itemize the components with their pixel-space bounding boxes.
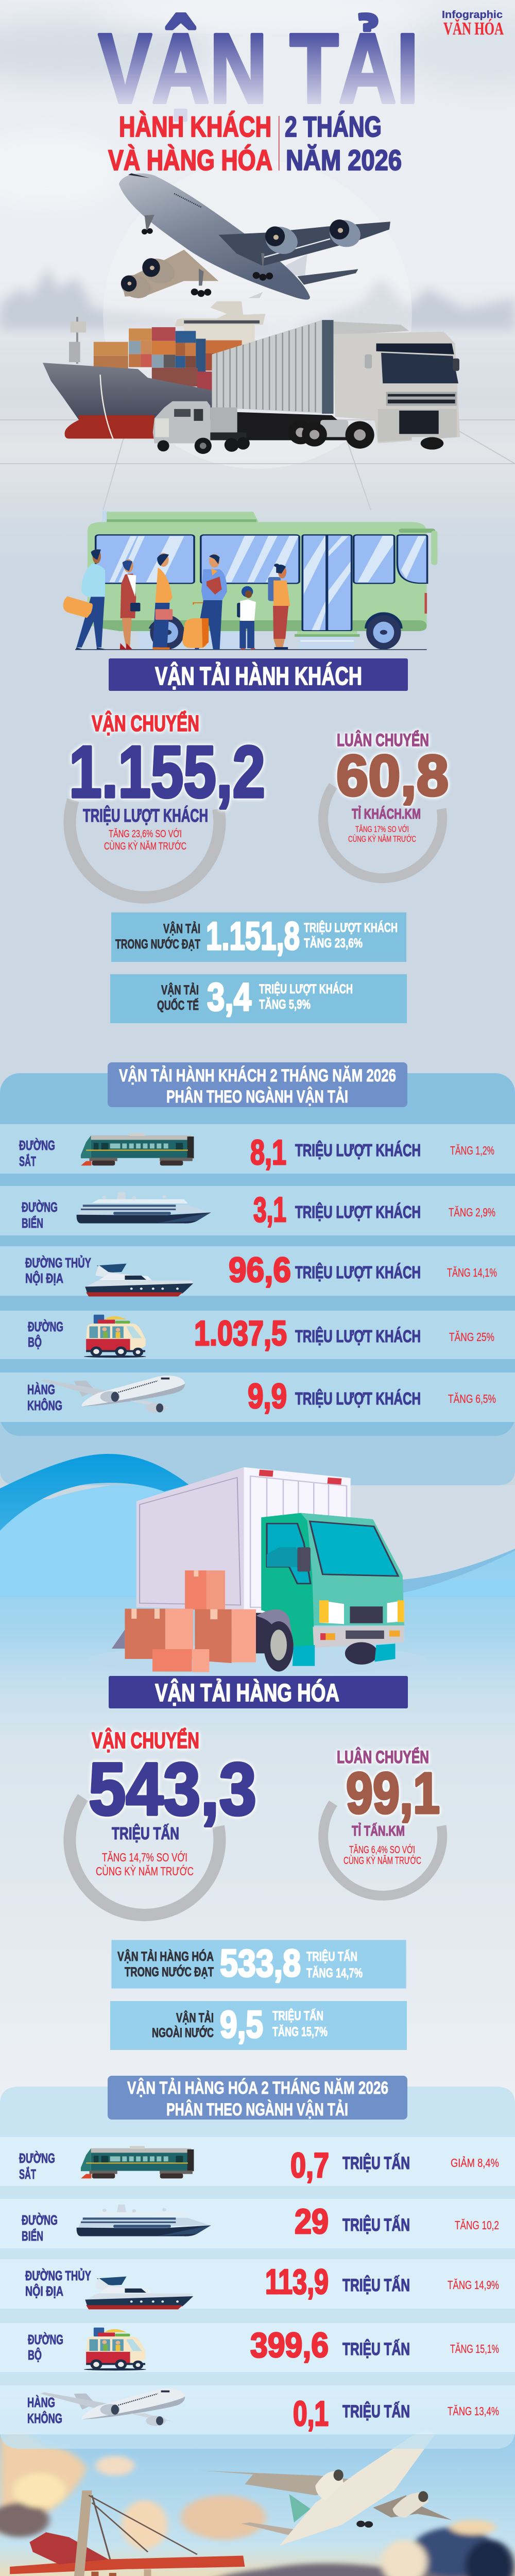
box: domestic passenger transport: VẬN TẢI: [163, 921, 200, 936]
row: air: TĂNG 6,5%: [448, 1392, 496, 1405]
row: rail: ĐƯỜNG: [19, 1138, 55, 1153]
photo: aircraft over port: [204, 2431, 452, 2546]
stat: freight carriage: TĂNG 14,7% SO VỚI: [102, 1851, 187, 1864]
stat: freight rotation: [323, 1748, 442, 1895]
row: sea: 29: [295, 2202, 329, 2241]
stat: passenger carriage: 1.155,2: [69, 731, 265, 813]
box: international passenger transport: QUỐC TẾ: [157, 997, 199, 1013]
box: domestic passenger transport: [111, 912, 406, 962]
box: domestic passenger transport: TRONG NƯỚC ĐẠT: [115, 936, 200, 952]
row: air: HÀNG: [27, 2395, 55, 2410]
subtitle: passenger and freight, 2 months 2026: [108, 110, 402, 176]
row: road: [0, 2323, 515, 2372]
logo: Infographic Văn Hóa: Infographic: [442, 9, 503, 21]
row: sea: [0, 1186, 515, 1235]
row: rail: [0, 1124, 515, 1174]
subtitle: passenger and freight, 2 months 2026: VÀ HÀNG HÓA: [108, 144, 272, 176]
section banner: freight transport: [109, 1676, 408, 1708]
hero photo background: [0, 0, 515, 567]
box: domestic freight: TĂNG 14,7%: [306, 1965, 363, 1980]
row: sea: 3,1: [253, 1190, 286, 1229]
row: sea: TĂNG 10,2: [455, 2218, 499, 2232]
row: rail: TRIỆU LƯỢT KHÁCH: [295, 1141, 421, 1160]
row: air: TRIỆU TẤN: [342, 2402, 410, 2421]
row: inland waterway: 113,9: [265, 2262, 329, 2301]
logo: Infographic Văn Hóa: [442, 9, 504, 39]
stat: freight carriage: CÙNG KỲ NĂM TRƯỚC: [96, 1865, 194, 1878]
row: sea: TĂNG 2,9%: [449, 1206, 495, 1219]
stat: passenger rotation: TỈ KHÁCH.KM: [352, 805, 421, 822]
stat: freight rotation: 99,1: [346, 1761, 440, 1825]
row: inland waterway: TRIỆU TẤN: [342, 2276, 410, 2295]
heading: passenger by mode: VẬN TẢI HÀNH KHÁCH 2 THÁNG NĂM 2026: [119, 1066, 396, 1086]
row: inland waterway: NỘI ĐỊA: [25, 2283, 63, 2299]
stat: passenger carriage: CÙNG KỲ NĂM TRƯỚC: [104, 840, 186, 852]
title: VẬN TẢI: VẬN TẢI: [98, 13, 419, 124]
row: rail: [0, 2137, 515, 2186]
box: international passenger transport: TRIỆU LƯỢT KHÁCH: [259, 981, 353, 996]
box: international freight: [110, 2001, 407, 2050]
row: road: 399,6: [250, 2326, 329, 2365]
stat: passenger rotation: 60,8: [336, 743, 449, 808]
heading: freight by mode: PHÂN THEO NGÀNH VẬN TẢI: [166, 2100, 348, 2120]
row: air: 9,9: [248, 1377, 287, 1416]
row: rail: TĂNG 1,2%: [450, 1144, 494, 1157]
row: road: ĐƯỜNG: [28, 1319, 63, 1334]
stat: passenger carriage: [69, 710, 265, 897]
box: international freight: TRIỆU TẤN: [272, 2008, 323, 2023]
stat: passenger carriage: TRIỆU LƯỢT KHÁCH: [83, 805, 208, 826]
stat: freight rotation: TĂNG 6,4% SO VỚI: [349, 1844, 415, 1856]
row: air: [0, 2385, 515, 2434]
box: international freight: 9,5: [220, 2003, 263, 2046]
row: road: ĐƯỜNG: [28, 2332, 63, 2347]
stat: freight rotation: LUÂN CHUYỂN: [337, 1748, 429, 1767]
row: air: KHÔNG: [27, 2411, 62, 2426]
box: domestic passenger transport: TĂNG 23,6%: [304, 936, 363, 951]
hero illustration: airplane: [118, 173, 390, 302]
row: sea: TRIỆU TẤN: [342, 2215, 410, 2235]
hero illustration: large container truck: [212, 320, 460, 450]
freight background: [0, 1391, 515, 2112]
box: international passenger transport: TĂNG 5,9%: [259, 997, 311, 1012]
row: rail: ĐƯỜNG: [19, 2150, 55, 2166]
row: inland waterway: NỘI ĐỊA: [25, 1270, 63, 1286]
box: international freight: TĂNG 15,7%: [272, 2024, 328, 2039]
box: domestic passenger transport: TRIỆU LƯỢT KHÁCH: [304, 920, 398, 935]
heading: passenger by mode: PHÂN THEO NGÀNH VẬN TẢI: [166, 1087, 348, 1107]
row: air: KHÔNG: [27, 1398, 62, 1413]
row: rail: SẮT: [19, 2166, 36, 2182]
stat: passenger rotation: [323, 731, 449, 878]
row: rail: 0,7: [290, 2146, 329, 2185]
row: sea: [0, 2199, 515, 2248]
row: air: [0, 1372, 515, 1422]
box: domestic freight: TRONG NƯỚC ĐẠT: [125, 1964, 214, 1979]
box: international freight: NGOÀI NƯỚC: [152, 2025, 214, 2040]
row: road: BỘ: [28, 1334, 42, 1350]
box: international freight: VẬN TẢI: [176, 2010, 214, 2025]
panel: freight transport by mode: [0, 2076, 515, 2449]
row: road: [0, 1311, 515, 1359]
row: road: 1.037,5: [194, 1314, 287, 1353]
row: road: TRIỆU TẤN: [342, 2340, 410, 2359]
stat: freight rotation: TỈ TẤN.KM: [352, 1822, 405, 1839]
stat: freight carriage: VẬN CHUYỂN: [92, 1727, 199, 1753]
box: domestic freight: TRIỆU TẤN: [306, 1948, 357, 1964]
row: sea: TRIỆU LƯỢT KHÁCH: [295, 1202, 421, 1222]
row: air: TRIỆU LƯỢT KHÁCH: [295, 1389, 421, 1408]
row: sea: BIỂN: [22, 1215, 43, 1231]
box: domestic freight: [111, 1940, 406, 1989]
photo: port cranes: [10, 2490, 248, 2576]
stat: freight carriage: 543,3: [89, 1748, 256, 1831]
stat: passenger rotation: CÙNG KỲ NĂM TRƯỚC: [348, 834, 416, 844]
stat: passenger carriage: VẬN CHUYỂN: [92, 710, 199, 736]
section banner: passenger transport: VẬN TẢI HÀNH KHÁCH: [155, 662, 362, 690]
box: domestic passenger transport: 1.151,8: [206, 914, 300, 958]
row: inland waterway: TRIỆU LƯỢT KHÁCH: [295, 1263, 421, 1282]
row: road: BỘ: [28, 2347, 42, 2363]
stat: freight rotation: CÙNG KỲ NĂM TRƯỚC: [344, 1855, 421, 1867]
row: air: HÀNG: [27, 1382, 55, 1397]
heading: freight by mode: VẬN TẢI HÀNG HÓA 2 THÁNG NĂM 2026: [127, 2078, 388, 2098]
illustration: bus and passengers: [63, 511, 437, 650]
row: inland waterway: [0, 1246, 515, 1297]
row: rail: TRIỆU TẤN: [342, 2154, 410, 2173]
box: domestic freight: VẬN TẢI HÀNG HÓA: [117, 1948, 214, 1964]
row: inland waterway: TĂNG 14,1%: [447, 1266, 497, 1279]
stat: freight carriage: [70, 1727, 256, 1915]
subtitle: passenger and freight, 2 months 2026: HÀNH KHÁCH: [119, 110, 271, 143]
rest of freight background above photo: [0, 2112, 515, 2432]
hero illustration: small truck: [153, 401, 250, 454]
row: air: 0,1: [293, 2394, 329, 2433]
section banner: freight transport: VẬN TẢI HÀNG HÓA: [155, 1679, 339, 1707]
row: road: TRIỆU LƯỢT KHÁCH: [295, 1327, 421, 1346]
box: domestic freight: 533,8: [220, 1942, 301, 1985]
subtitle: passenger and freight, 2 months 2026: NĂM 2026: [286, 144, 402, 176]
box: international passenger transport: VẬN TẢI: [161, 982, 199, 997]
row: rail: GIẢM 8,4%: [451, 2155, 499, 2170]
bottom photo: sky and clouds at sunset: [0, 2396, 515, 2576]
stat: passenger rotation: LUÂN CHUYỂN: [337, 731, 429, 750]
stat: freight carriage: TRIỆU TẤN: [112, 1824, 179, 1843]
row: sea: BIỂN: [22, 2228, 43, 2244]
row: rail: SẮT: [19, 1154, 36, 1169]
heading: freight by mode: [108, 2076, 407, 2120]
subtitle: passenger and freight, 2 months 2026: 2 THÁNG: [285, 110, 382, 143]
row: inland waterway: 96,6: [229, 1250, 291, 1290]
box: international passenger transport: 3,4: [207, 975, 251, 1019]
box: international passenger transport: [110, 974, 407, 1023]
row: sea: ĐƯỜNG: [22, 1199, 58, 1215]
hero illustration: container ship: [43, 301, 266, 439]
stat: passenger rotation: TĂNG 17% SO VỚI: [355, 824, 409, 834]
row: inland waterway: ĐƯỜNG THỦY: [25, 1255, 91, 1270]
row: inland waterway: [0, 2259, 515, 2310]
stat: passenger carriage: TĂNG 23,6% SO VỚI: [109, 828, 182, 840]
illustration: delivery truck with boxes: [88, 1467, 428, 1675]
row: inland waterway: ĐƯỜNG THỦY: [25, 2267, 91, 2283]
row: road: TĂNG 25%: [449, 1330, 494, 1344]
heading: passenger by mode: [108, 1062, 407, 1107]
panel: passenger transport by mode: [0, 1062, 515, 1436]
row: rail: 8,1: [250, 1133, 286, 1172]
section banner: passenger transport: [109, 658, 408, 691]
row: sea: ĐƯỜNG: [22, 2212, 58, 2228]
